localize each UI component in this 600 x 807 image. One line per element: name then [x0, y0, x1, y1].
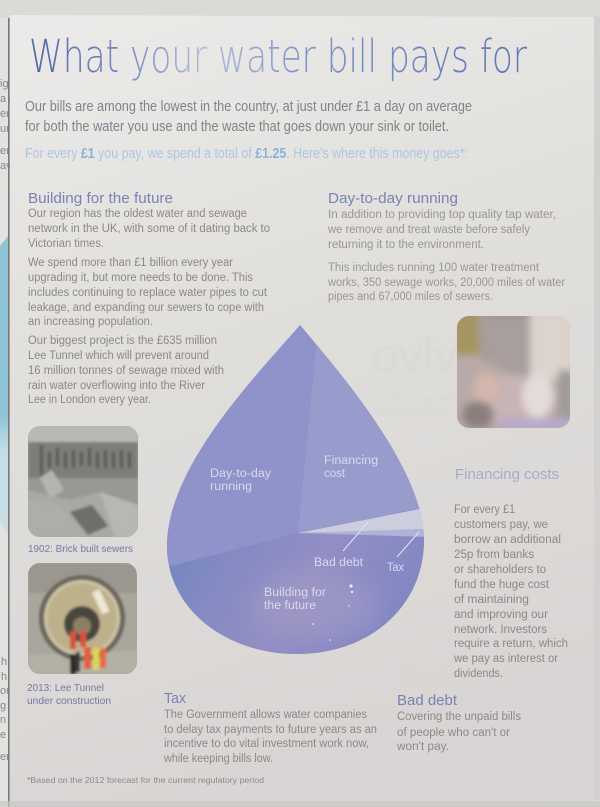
- body: building for the future: Victorian times.: [28, 238, 104, 250]
- neighbouring page sliver: er: [0, 751, 10, 763]
- segment: building for the future: [169, 536, 424, 654]
- body: financing costs: borrow an additional: [454, 534, 561, 546]
- body: bad debt: [396, 711, 521, 753]
- label: financing cost: [324, 455, 378, 480]
- label: building for the future: the future: [264, 600, 316, 612]
- heading: day-to-day running: Day-to-day running: [328, 190, 458, 207]
- body: financing costs: 25p from banks: [454, 549, 534, 561]
- neighbouring page sliver: un: [0, 123, 12, 135]
- body: building for the future: leakage, and expanding our sewers to cope with: [28, 302, 264, 314]
- spending summary line: For every £1 you pay, we spend a total of £1.25. Here's where this money goes*:: [25, 145, 468, 162]
- leader line: tax: [397, 532, 419, 557]
- segment: tax: [298, 529, 430, 537]
- neighbouring page sliver: n: [0, 714, 6, 726]
- caption: 2013 photo: under construction: [27, 695, 111, 707]
- body: financing costs: of maintaining: [454, 594, 529, 606]
- body: financing costs: fund the huge cost: [454, 579, 550, 591]
- body: building for the future: Our biggest project is the £635 million: [28, 335, 217, 347]
- footnote: *Based on the 2012 forecast for the current regulatory period: [27, 775, 264, 785]
- body: building for the future: rain water overflowing into the River: [28, 380, 205, 392]
- body: day-to-day running: pipes and 67,000 miles of sewers.: [328, 291, 493, 303]
- body: financing costs: require a return, which: [454, 638, 568, 650]
- photo: child drinking water: [457, 316, 570, 428]
- panel: tax: [163, 690, 377, 765]
- body: tax: [163, 709, 377, 765]
- intro text: Our bills are among the lowest in the country, at just under £1 a day on average: [25, 98, 472, 115]
- label: bad debt: Bad debt: [314, 557, 364, 569]
- body: bad debt: Covering the unpaid bills: [397, 711, 521, 723]
- body: building for the future: Our region has the oldest water and sewage: [28, 208, 247, 220]
- faint show-through text: monthly payments: [372, 393, 462, 405]
- photo: 1902 brick built sewers: [28, 426, 138, 537]
- body: tax: to delay tax payments to future years as an: [164, 724, 377, 736]
- panel: day-to-day running: [327, 190, 565, 303]
- neighbouring page sliver: ig: [0, 78, 9, 90]
- body: day-to-day running: In addition to providing top quality tap water,: [328, 209, 556, 221]
- neighbouring page sliver: h: [1, 671, 7, 683]
- body: day-to-day running: [327, 209, 565, 303]
- label: day-to-day running: running: [210, 481, 252, 493]
- panel: bad debt: [396, 692, 521, 753]
- neighbouring page sliver: er: [0, 108, 10, 120]
- body: day-to-day running: we remove and treat waste before safely: [327, 224, 530, 236]
- label: financing cost: cost: [324, 468, 346, 480]
- body: building for the future: 16 million tonnes of sewage mixed with: [28, 365, 224, 377]
- faint show-through text: and paying bills: [372, 405, 448, 417]
- caption: 2013 photo: [27, 682, 111, 707]
- body: day-to-day running: This includes running 100 water treatment: [328, 262, 540, 274]
- intro text: [25, 98, 472, 135]
- neighbouring page sliver: [0, 18, 15, 807]
- label: building for the future: Building for: [264, 587, 326, 599]
- heading: tax: Tax: [164, 690, 186, 707]
- panel: building for the future: [28, 190, 270, 406]
- neighbouring page sliver: av: [0, 160, 12, 172]
- body: bad debt: of people who can't or: [397, 727, 510, 739]
- faint show-through text: more Monday to Friday: [375, 756, 489, 768]
- neighbouring page sliver: e: [0, 729, 6, 741]
- body: building for the future: We spend more than £1 billion every year: [28, 257, 233, 269]
- lilac sheen on lower drop: [258, 578, 376, 636]
- body: building for the future: Lee Tunnel which will prevent around: [28, 350, 209, 362]
- neighbouring page sliver: ou: [0, 685, 12, 697]
- faint show-through text: [372, 330, 491, 768]
- intro text: for both the water you use and the waste that goes down your sink or toilet.: [25, 118, 449, 135]
- body: financing costs: customers pay, we: [454, 519, 548, 531]
- photo: 2013 lee tunnel: [28, 563, 137, 674]
- body: building for the future: an increasing population.: [28, 316, 153, 328]
- heading: financing costs: Financing costs: [455, 466, 559, 483]
- body: financing costs: network. Investors: [454, 624, 547, 636]
- body: financing costs: and improving our: [454, 609, 548, 621]
- neighbouring page sliver: er: [0, 145, 10, 157]
- drop segments: [160, 320, 430, 660]
- label: tax: Tax: [387, 562, 404, 574]
- body: financing costs: dividends.: [454, 668, 503, 680]
- label: day-to-day running: Day-to-day: [210, 468, 271, 480]
- body: financing costs: [453, 504, 568, 680]
- body: building for the future: includes continuing to replace water pipes to cut: [28, 287, 268, 299]
- panel: financing costs: [453, 466, 568, 680]
- body: tax: incentive to do vital investment work now,: [164, 738, 369, 750]
- body: financing costs: we pay as interest or: [453, 653, 558, 665]
- body: tax: while keeping bills low.: [163, 753, 273, 765]
- body: building for the future: network in the UK, with some of it dating back to: [28, 223, 270, 235]
- body: bad debt: won't pay.: [396, 741, 449, 753]
- leader line: bad debt: [343, 522, 368, 551]
- label: financing cost: Financing: [324, 455, 378, 467]
- body: tax: The Government allows water companies: [164, 709, 367, 721]
- neighbouring page sliver: h: [1, 656, 7, 668]
- body: building for the future: [28, 208, 270, 406]
- segment: day-to-day running: [160, 320, 318, 572]
- caption: 1902 photo: 1902: Brick built sewers: [28, 543, 133, 555]
- faint show-through text: ovlvo: [372, 330, 484, 383]
- label: day-to-day running: [210, 468, 271, 493]
- caption: 2013 photo: 2013: Lee Tunnel: [27, 682, 104, 694]
- segment: bad debt: [298, 509, 424, 533]
- body: day-to-day running: works, 350 sewage works, 20,000 miles of water: [327, 277, 565, 289]
- heading: building for the future: Building for the future: [28, 190, 173, 207]
- heading: bad debt: Bad debt: [397, 692, 458, 709]
- body: financing costs: or shareholders to: [454, 564, 546, 576]
- body: building for the future: upgrading it, but more needs to be done. This: [28, 272, 253, 284]
- segment: financing cost: [298, 344, 419, 532]
- neighbouring page sliver: a c: [0, 93, 15, 105]
- faint show-through text: bonusses: [405, 666, 491, 688]
- body: building for the future: Lee in London every year.: [28, 394, 151, 406]
- body: day-to-day running: returning it to the environment.: [328, 239, 484, 251]
- chart: water drop breakdown: [160, 320, 430, 660]
- label: building for the future: [264, 587, 326, 612]
- neighbouring page sliver: g: [0, 700, 6, 712]
- body: financing costs: For every £1: [454, 504, 515, 516]
